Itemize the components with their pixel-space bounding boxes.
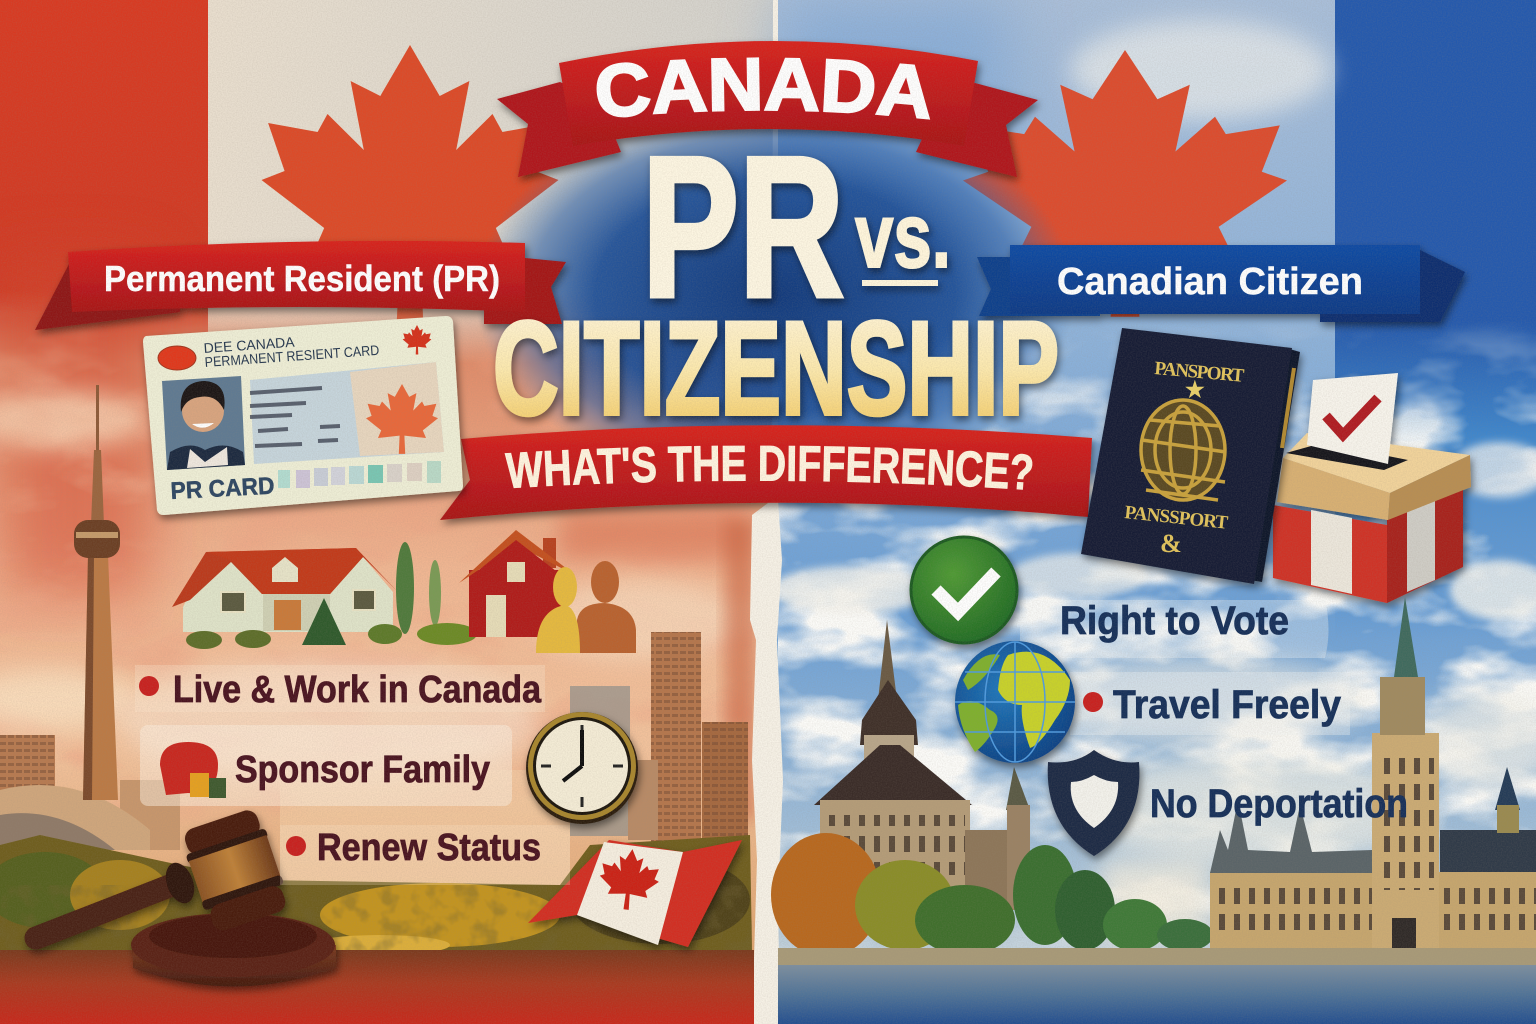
banner label: Canadian Citizen <box>1057 261 1363 303</box>
panel: left red background <box>0 0 775 1024</box>
card label: PR CARD <box>170 473 275 505</box>
text: sponsor family: Sponsor Family <box>235 749 490 791</box>
bullet: renew status <box>286 836 306 856</box>
text: right to vote: Right to Vote <box>1060 599 1289 643</box>
gavel handle <box>36 885 172 938</box>
icon: houses <box>172 530 575 649</box>
torn paper divider <box>750 0 783 1024</box>
card small leaf <box>403 325 431 354</box>
card emblem <box>158 346 196 370</box>
banner: Canadian Citizen <box>977 245 1465 322</box>
passport <box>1081 328 1300 584</box>
text: live and work: Live & Work in Canada <box>173 669 542 711</box>
central navy glow <box>475 100 1075 490</box>
banner: Permanent Resident <box>35 241 566 330</box>
text: renew status: Renew Status <box>317 827 541 869</box>
left city skyline <box>0 632 748 885</box>
parliament tower and building right <box>1210 597 1536 950</box>
card map <box>250 362 444 464</box>
passport lower text: PANSSPORT <box>1123 502 1229 534</box>
text: no deportation: No Deportation <box>1150 782 1408 826</box>
bullet: travel freely <box>1083 692 1103 712</box>
card hologram strip <box>278 461 441 488</box>
title: CITIZENSHIP: CITIZENSHIP <box>493 295 1059 443</box>
passport crest <box>1141 400 1226 500</box>
icon: family silhouettes <box>536 561 636 653</box>
trees right <box>771 833 1213 957</box>
bullet: live and work <box>139 676 159 696</box>
gavel base <box>131 913 336 986</box>
title ribbon: CANADA <box>497 40 1042 185</box>
text: travel freely: Travel Freely <box>1113 683 1342 727</box>
title: PR: PR <box>642 116 844 339</box>
list panel left <box>135 665 570 885</box>
card details <box>250 388 340 446</box>
ballot paper with check <box>1307 373 1398 464</box>
gavel head <box>178 806 292 934</box>
subtitle text: WHAT'S THE DIFFERENCE? <box>504 446 1032 490</box>
ballot box <box>1273 373 1471 603</box>
icon: sponsor family chat <box>160 742 226 798</box>
water right <box>778 965 1536 1024</box>
banner label: Permanent Resident (PR) <box>104 258 500 299</box>
subtitle banner <box>440 424 1099 528</box>
icon: globe <box>955 641 1075 763</box>
PR card <box>143 316 463 515</box>
passport top text: PANSPORT <box>1154 358 1245 387</box>
promenade <box>778 948 1536 966</box>
parliament building left <box>814 620 1030 910</box>
passport ampersand: & <box>1160 529 1182 558</box>
passport star: ★ <box>1185 377 1205 402</box>
gavel <box>36 806 336 986</box>
maple leaf flag <box>528 840 742 947</box>
card heading: DEE CANADA <box>203 334 296 356</box>
icon: CN Tower <box>74 385 120 800</box>
card title: PERMANENT RESIENT CARD <box>204 342 380 370</box>
water left <box>0 950 754 1024</box>
autumn trees left <box>0 835 752 955</box>
icon: clock <box>526 712 638 824</box>
icon: green check <box>911 537 1017 643</box>
title word: CANADA: CANADA <box>596 57 930 120</box>
title: vs.: vs. <box>855 185 951 287</box>
list panel right <box>911 537 1408 856</box>
icon: shield <box>1048 750 1139 856</box>
card photo <box>162 376 245 470</box>
panel: right blue background <box>770 0 1536 1024</box>
